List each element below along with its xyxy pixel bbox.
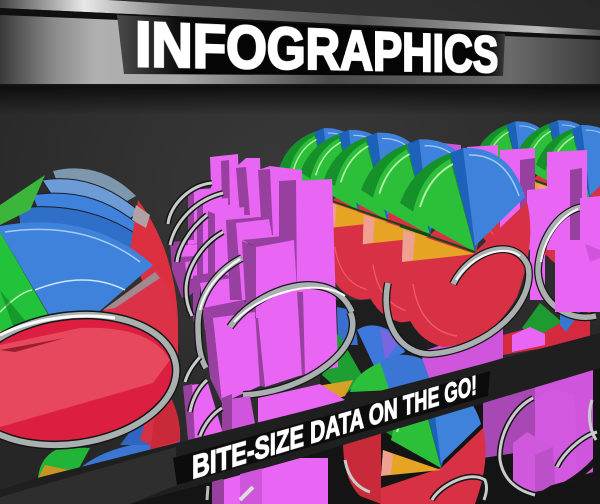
magenta bars: right front	[555, 196, 600, 312]
small silver rings: centre	[168, 183, 242, 368]
slice: red upper	[103, 270, 178, 380]
pie chart: lower shelf	[343, 385, 486, 504]
slice: green	[0, 232, 63, 352]
small silver rings: below the centre	[185, 357, 222, 436]
title plate	[117, 15, 505, 76]
silver rings: lower shelf right	[500, 398, 597, 495]
pie chart: left front red face	[0, 303, 184, 457]
pie chart: front centre	[400, 148, 530, 347]
header band	[0, 0, 600, 86]
magenta bars: centre front three	[203, 179, 338, 403]
silver ring: front pie	[386, 249, 529, 354]
silver ring: right cluster	[538, 207, 596, 317]
magenta bars: centre back row	[210, 154, 304, 240]
magenta bars: below the centre ring	[183, 383, 345, 440]
pie charts: lower middle shelf	[306, 300, 450, 410]
magenta bars: behind front pie	[420, 143, 503, 380]
slice: blue	[0, 222, 153, 342]
shelf label text: BITE-SIZE DATA ON THE GO!	[192, 370, 477, 486]
magenta bars: right cluster	[500, 148, 590, 355]
shelf label bar	[0, 333, 600, 504]
magenta bars: lower shelf right	[483, 362, 593, 495]
silver rings: lower shelf pie	[345, 460, 487, 500]
header shadow	[0, 85, 600, 115]
magenta bars: centre receding row	[170, 188, 273, 335]
title: INFOGRAPHICS	[135, 8, 498, 83]
silver ring: centre front	[230, 285, 353, 395]
silver ring: left front	[0, 302, 185, 458]
pie charts: main row behind the front pie	[280, 128, 481, 322]
pie charts: back right row	[474, 120, 600, 268]
pie chart: left stacked slices	[0, 168, 180, 450]
pie chart: left lower shelf	[38, 370, 180, 478]
magenta bars: lower shelf left	[207, 458, 328, 504]
slice: orange	[0, 330, 22, 352]
lower shelf back	[130, 368, 600, 504]
shelf label plate	[173, 371, 490, 485]
